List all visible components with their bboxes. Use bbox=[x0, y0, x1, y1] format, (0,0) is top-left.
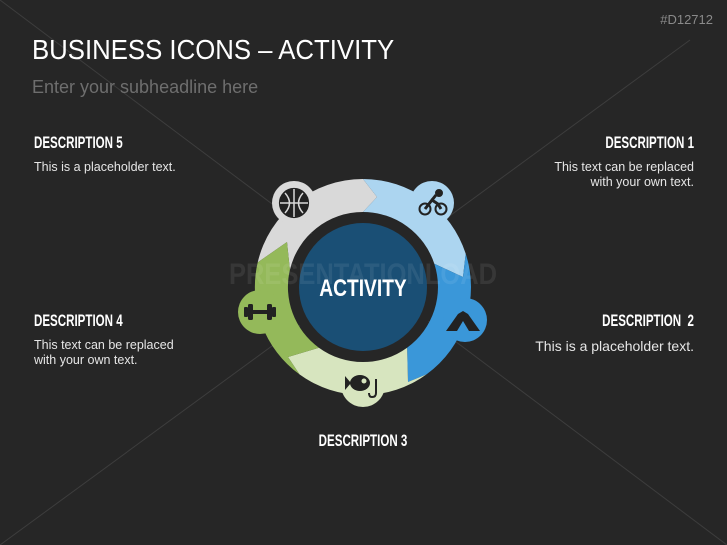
description 4 bbox=[34, 311, 174, 367]
icon: dumbbell bbox=[244, 304, 276, 320]
description 5: This is a placeholder text. bbox=[34, 160, 176, 174]
description 1 bbox=[554, 133, 694, 189]
segment: basketball gray bbox=[258, 179, 377, 270]
description 2: DESCRIPTION 2 bbox=[602, 311, 694, 330]
segment: fish pale green bbox=[288, 348, 426, 407]
watermark: PRESENTATIONLOAD bbox=[229, 257, 497, 290]
description 1: with your own text. bbox=[590, 175, 694, 189]
description 1: DESCRIPTION 1 bbox=[605, 133, 694, 152]
segment: dumbbell green bbox=[238, 242, 319, 374]
description 2: This is a placeholder text. bbox=[535, 338, 694, 354]
centre label: ACTIVITY bbox=[319, 274, 407, 302]
icon: cyclist bbox=[420, 190, 446, 214]
description 4: This text can be replaced bbox=[34, 338, 174, 352]
description 4: with your own text. bbox=[34, 353, 138, 367]
subheadline: Enter your subheadline here bbox=[32, 77, 258, 97]
segment: cyclist light blue bbox=[363, 179, 466, 277]
title: BUSINESS ICONS – ACTIVITY bbox=[32, 34, 394, 65]
icon: tent bbox=[446, 311, 480, 331]
icon: basketball bbox=[280, 189, 308, 217]
segment: tent blue bbox=[407, 254, 487, 382]
description 5: DESCRIPTION 5 bbox=[34, 133, 123, 152]
code tag: #D12712 bbox=[660, 12, 713, 27]
description 5 bbox=[34, 133, 176, 174]
description 4: DESCRIPTION 4 bbox=[34, 311, 123, 330]
description 2 bbox=[535, 311, 694, 354]
icon: fish bbox=[345, 375, 376, 397]
inner dark ring and centre circle bbox=[289, 213, 437, 361]
description 3: DESCRIPTION 3 bbox=[319, 431, 407, 450]
description 1: This text can be replaced bbox=[554, 160, 694, 174]
